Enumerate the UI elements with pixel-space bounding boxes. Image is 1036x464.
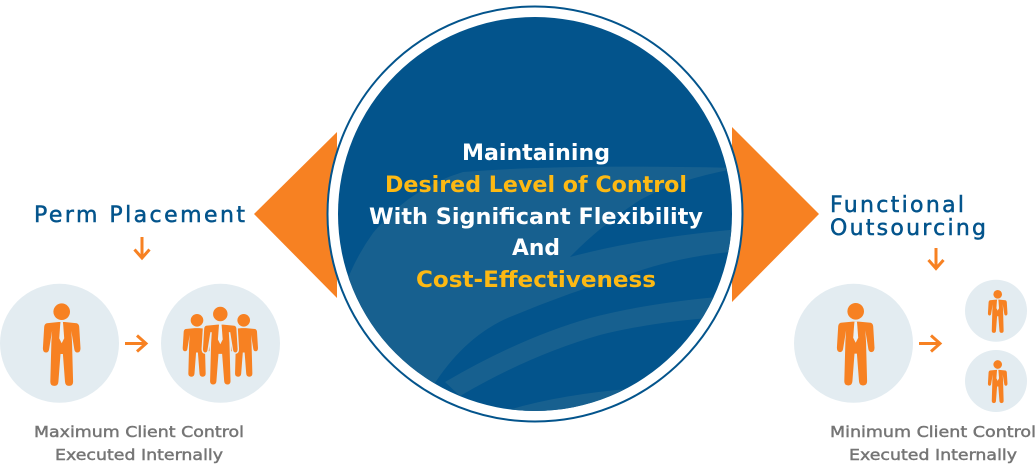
caption: right (830, 423, 1036, 464)
swoosh: large band (340, 167, 740, 386)
heading: Functional Outsourcing: Outsourcing (830, 216, 986, 241)
central message: Desired Level of Control (385, 172, 687, 198)
swoosh: bottom band (511, 389, 626, 411)
central message: Maintaining (462, 140, 610, 166)
central message: And (512, 235, 560, 261)
icon: team of three (161, 284, 280, 403)
arrow: down right (928, 248, 944, 268)
icon: small person bottom (965, 350, 1027, 412)
heading: Perm Placement: Perm Placement (34, 203, 245, 228)
icon: single person right (794, 284, 913, 403)
caption: left: Maximum Client Control (34, 423, 244, 441)
heading: Functional Outsourcing: Functional (830, 193, 964, 218)
triangle: left (254, 132, 337, 298)
icon: single person left (0, 284, 119, 403)
caption: right: Executed Internally (849, 446, 1017, 464)
icon: small person top (965, 280, 1027, 342)
arrow: right left group (125, 336, 146, 352)
central message (369, 140, 703, 293)
central circle (328, 6, 742, 425)
triangle: right (732, 127, 819, 302)
caption: left (34, 423, 244, 464)
caption: left: Executed Internally (55, 446, 223, 464)
swoosh: middle band (446, 298, 714, 396)
arrow: down left (134, 237, 150, 258)
heading: Functional Outsourcing (830, 193, 986, 241)
central message: With Significant Flexibility (369, 204, 703, 230)
caption: right: Minimum Client Control (830, 423, 1036, 441)
arrow: right right group (919, 336, 940, 352)
central message: Cost-Effectiveness (416, 267, 656, 293)
